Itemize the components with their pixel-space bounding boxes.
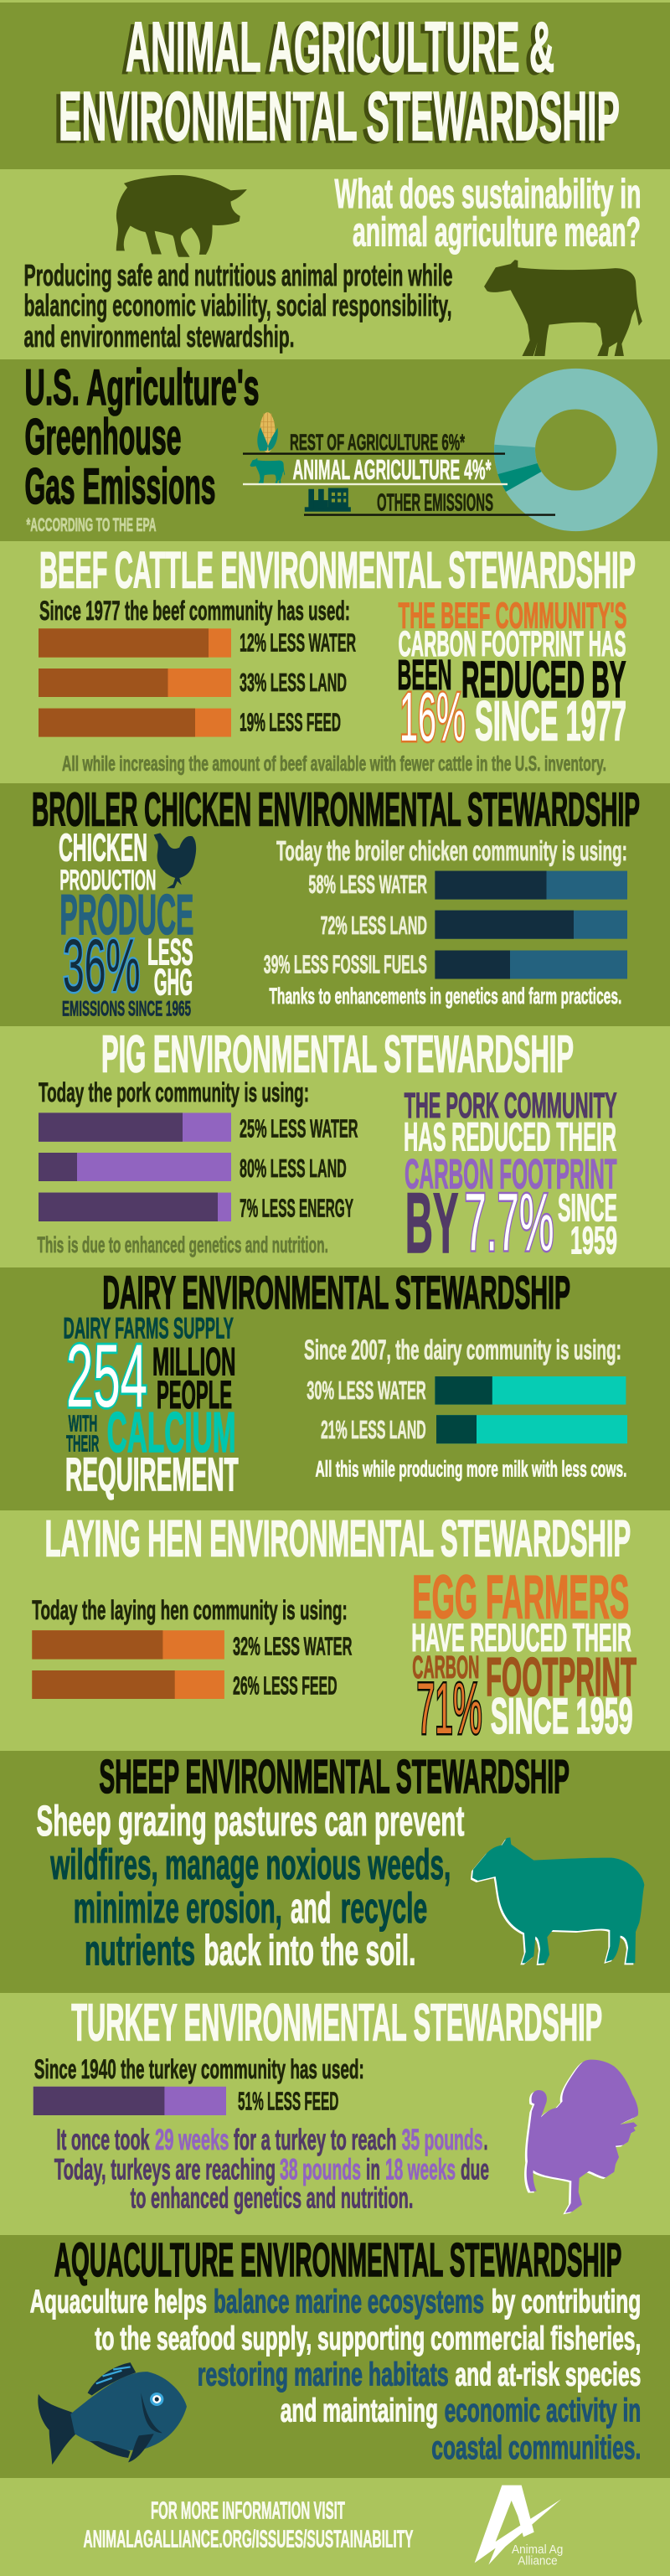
- panel: aquaculture: [0, 2233, 670, 2478]
- callout: chicken GHG: [59, 826, 193, 1021]
- panel: footer: [0, 2478, 670, 2576]
- aquaculture text: restoring marine habitats: [198, 2357, 449, 2393]
- bar chart: broiler: 39% LESS FOSSIL FUELS: [264, 950, 427, 979]
- sheep text: minimize erosion,: [74, 1884, 282, 1932]
- logo: Animal Ag Alliance: Animal Ag: [512, 2543, 563, 2557]
- panel: beef cattle: [0, 541, 670, 783]
- bar chart: broiler: [264, 870, 627, 979]
- panel: pig: [0, 1026, 670, 1271]
- callout: pork carbon footprint: 1959: [570, 1219, 617, 1262]
- panel: broiler chicken: [0, 783, 670, 1026]
- callout: egg carbon footprint: [411, 1563, 636, 1749]
- bar chart: dairy: [307, 1376, 627, 1444]
- turkey text: Today, turkeys are reaching: [54, 2154, 276, 2186]
- bar chart: dairy: 30% LESS WATER: [307, 1376, 426, 1405]
- turkey text: [54, 2124, 489, 2214]
- emissions heading: Greenhouse: [25, 409, 182, 465]
- label: other emissions: OTHER EMISSIONS: [377, 489, 493, 516]
- icon: factory: [305, 488, 351, 512]
- icon: corn: [257, 412, 278, 452]
- beef intro: Since 1977 the beef community has used:: [39, 596, 350, 626]
- bar chart: laying hen: [32, 1630, 352, 1701]
- bar chart: pig: 80% LESS LAND: [240, 1154, 347, 1183]
- bar chart: beef: 19% LESS FEED: [240, 709, 341, 737]
- callout: dairy calcium: THEIR: [66, 1431, 99, 1456]
- title text: [59, 8, 620, 155]
- question heading: [335, 172, 642, 255]
- bar chart: pig: 7% LESS ENERGY: [240, 1195, 353, 1223]
- icon: turkey: [524, 2060, 638, 2214]
- callout: beef carbon footprint: BEEN: [397, 651, 452, 699]
- callout: dairy calcium: REQUIREMENT: [65, 1448, 239, 1500]
- callout: chicken GHG: CHICKEN: [59, 826, 147, 870]
- callout: egg carbon footprint: CARBON: [412, 1650, 479, 1685]
- icon: pig: [116, 175, 247, 257]
- turkey text: 29 weeks: [155, 2124, 229, 2156]
- callout: egg carbon footprint: 71%: [417, 1669, 482, 1749]
- panel: laying hen: [0, 1510, 670, 1751]
- callout: dairy calcium: DAIRY FARMS SUPPLY: [64, 1312, 234, 1345]
- aquaculture text: [30, 2284, 641, 2466]
- aquaculture text: balance marine ecosystems: [214, 2284, 484, 2320]
- title shadow: [54, 10, 616, 157]
- emissions heading: [25, 359, 260, 514]
- turkey intro: Since 1940 the turkey community has used:: [34, 2054, 364, 2084]
- sheep text: back into the soil.: [204, 1926, 415, 1974]
- emissions heading: U.S. Agriculture's: [25, 359, 260, 416]
- label: rest of agriculture: REST OF AGRICULTURE 6%*: [290, 430, 465, 455]
- callout: dairy calcium: MILLION: [152, 1339, 236, 1383]
- label: animal agriculture: ANIMAL AGRICULTURE 4%*: [293, 454, 492, 485]
- panel: broiler chicken: GHG: [154, 963, 193, 1004]
- panel: greenhouse gas emissions: [0, 359, 670, 541]
- turkey text: to enhanced genetics and nutrition.: [131, 2181, 413, 2214]
- logo: Animal Ag Alliance: Alliance: [518, 2555, 558, 2568]
- icon: chicken: [154, 833, 196, 888]
- EPA footnote: *ACCORDING TO THE EPA: [27, 514, 157, 535]
- callout: pork carbon footprint: BY: [405, 1175, 459, 1271]
- turkey text: for a turkey to reach: [234, 2124, 397, 2156]
- pig intro: Today the pork community is using:: [39, 1077, 309, 1107]
- bar chart: turkey: [34, 2087, 338, 2116]
- bar chart: dairy: 21% LESS LAND: [321, 1415, 426, 1444]
- callout: chicken GHG: 36%: [63, 923, 141, 1007]
- panel: turkey: [0, 1993, 670, 2235]
- callout: beef carbon footprint: [397, 595, 626, 756]
- bar chart: beef: 33% LESS LAND: [240, 669, 347, 697]
- callout: chicken GHG: EMISSIONS SINCE 1965: [62, 998, 191, 1021]
- panel: broiler chicken: LESS: [147, 932, 193, 973]
- turkey text: 38 pounds: [280, 2154, 361, 2186]
- bar chart: broiler: 58% LESS WATER: [308, 870, 427, 899]
- panel: broiler chicken: PRODUCE: [59, 883, 193, 947]
- callout: dairy calcium: [64, 1312, 239, 1500]
- turkey text: .: [484, 2124, 487, 2156]
- callout: dairy calcium: 254: [66, 1325, 147, 1426]
- panel: what sustainability means: [0, 169, 670, 359]
- sheep text: recycle: [341, 1884, 427, 1932]
- sheep text: nutrients: [85, 1926, 195, 1974]
- footer text: FOR MORE INFORMATION VISIT: [151, 2497, 345, 2524]
- definition text: [23, 258, 452, 354]
- definition text: and environmental stewardship.: [23, 319, 295, 354]
- callout: dairy calcium: CALCIUM: [107, 1401, 236, 1464]
- callout: beef carbon footprint: 16%: [399, 678, 466, 756]
- turkey text: 18 weeks: [385, 2154, 456, 2186]
- icon: sheep: [471, 1837, 644, 1965]
- sheep text: [36, 1797, 464, 1974]
- panel: turkey: 51% LESS FEED: [238, 2087, 338, 2116]
- callout: chicken GHG: PRODUCTION: [59, 865, 156, 896]
- logo: Animal Ag Alliance: [475, 2486, 563, 2568]
- panel: title: [0, 3, 670, 169]
- callout: pork carbon footprint: 7.7%: [464, 1176, 554, 1268]
- icon: cow: [484, 260, 642, 356]
- bar chart: broiler: 72% LESS LAND: [321, 911, 427, 940]
- bar chart: pig: [39, 1112, 358, 1223]
- turkey text: It once took: [56, 2124, 150, 2156]
- aquaculture text: Aquaculture helps: [30, 2284, 207, 2320]
- bar chart: pig: 25% LESS WATER: [240, 1114, 358, 1143]
- turkey text: in: [366, 2154, 380, 2186]
- callout: dairy calcium: PEOPLE: [157, 1372, 232, 1417]
- icon: small cow: [250, 458, 285, 483]
- turkey text: due: [461, 2154, 489, 2186]
- panel: dairy: [0, 1266, 670, 1510]
- bar chart: beef: 12% LESS WATER: [240, 628, 356, 657]
- pig note: This is due to enhanced genetics and nutrition.: [37, 1232, 328, 1257]
- sheep text: and: [291, 1884, 331, 1932]
- icon: fish: [38, 2362, 187, 2465]
- footer text: [84, 2497, 414, 2553]
- callout: pork carbon footprint: [404, 1086, 617, 1271]
- donut chart: [494, 369, 657, 531]
- turkey text: 35 pounds: [402, 2124, 482, 2156]
- panel: sheep: [0, 1750, 670, 1993]
- callout: dairy calcium: WITH: [69, 1410, 97, 1436]
- bar chart: beef: [39, 628, 356, 737]
- emissions heading: Gas Emissions: [25, 458, 216, 514]
- bar chart: laying hen: 26% LESS FEED: [233, 1672, 338, 1701]
- bar chart: laying hen: 32% LESS WATER: [233, 1632, 352, 1660]
- hen intro: Today the laying hen community is using:: [32, 1595, 348, 1625]
- aquaculture text: and maintaining: [281, 2393, 438, 2429]
